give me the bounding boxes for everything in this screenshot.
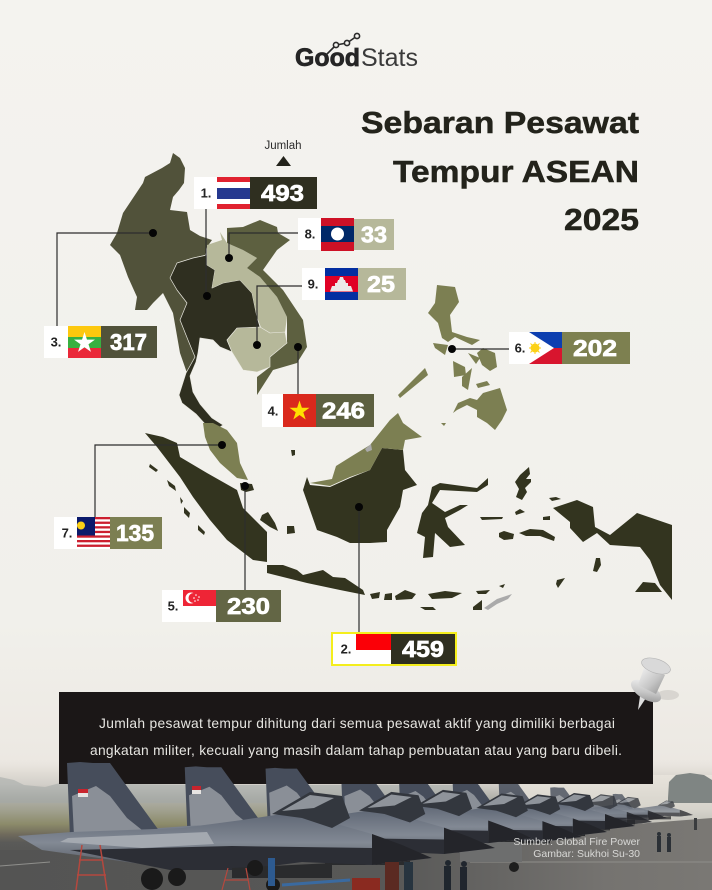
- label 3: Myanmar 317: 317: [110, 329, 147, 355]
- label 9: Cambodia 25: 9.: [308, 276, 318, 292]
- map: Mindanao: [453, 388, 507, 430]
- label 9: Cambodia 25: 25: [367, 271, 395, 297]
- map: Riau islands: [240, 483, 254, 492]
- map: Laos: [207, 232, 287, 333]
- source credit: [513, 836, 640, 860]
- grey service truck: [460, 842, 522, 862]
- map: Myanmar: [110, 153, 212, 373]
- label 4: Vietnam 246: 246: [322, 398, 365, 424]
- source credit: Sumber: Global Fire Power: [513, 836, 640, 848]
- map: Palawan: [398, 368, 428, 398]
- label 9: Cambodia 25: [302, 268, 406, 300]
- label 5: Singapore 230: 230: [227, 593, 270, 619]
- map: Lesser Sunda Islands: [370, 584, 505, 610]
- map: Vietnam: [227, 220, 307, 395]
- label 1: Thailand 493: 493: [261, 180, 304, 206]
- label 6: Philippines 202: [509, 332, 630, 364]
- label 4: Vietnam 246: 4.: [268, 404, 278, 418]
- landing gear and ground crew: [76, 818, 697, 890]
- label 2: Indonesia 459: 2.: [341, 642, 351, 656]
- label 7: Malaysia 135: 135: [116, 520, 154, 546]
- map: Luzon: [428, 285, 480, 345]
- label 3: Myanmar 317: [44, 326, 157, 358]
- map: Sulawesi: [417, 478, 488, 558]
- map: Kalimantan: [303, 448, 417, 543]
- label 5: Singapore 230: 5.: [168, 598, 178, 614]
- label 1: Thailand 493: 1.: [201, 186, 211, 200]
- label 8: Laos 33: 8.: [305, 226, 315, 242]
- map: Papua south coast: [635, 582, 662, 592]
- info note box: Jumlah pesawat tempur dihitung dari semua pesawat aktif yang dimiliki berbagai: [99, 716, 615, 731]
- label 5: Singapore 230: [162, 590, 281, 622]
- map: Maluku islands: [480, 467, 601, 588]
- label 8: Laos 33: [298, 218, 394, 251]
- logo: GoodStats: Good: [295, 44, 360, 72]
- photo background: airfield: [0, 758, 712, 890]
- label 3: Myanmar 317: 3.: [51, 334, 61, 350]
- label 8: Laos 33: 33: [361, 222, 387, 248]
- logo: GoodStats: [295, 33, 418, 72]
- map of Southeast Asia: [110, 153, 672, 610]
- bright right side of airfield: [520, 775, 712, 833]
- label 7: Malaysia 135: [54, 517, 162, 549]
- map: Timor-Leste: [484, 594, 512, 610]
- legend: Jumlah sort indicator: Jumlah: [264, 140, 302, 152]
- logo: GoodStats: Stats: [361, 44, 418, 72]
- label 4: Vietnam 246: [262, 394, 374, 427]
- legend: Jumlah sort indicator: [264, 140, 302, 166]
- map: Papua: [553, 500, 672, 600]
- map: islands west of Sumatra: [149, 450, 295, 535]
- title: Tempur ASEAN: [393, 154, 639, 189]
- title: 2025: [564, 202, 639, 237]
- label 2: Indonesia 459: 459: [402, 636, 444, 662]
- map: Mindoro: [433, 343, 448, 355]
- map: Cambodia: [227, 327, 287, 372]
- location dots: [149, 229, 456, 511]
- fighter jets behind the note box: [309, 774, 693, 850]
- connector lines: [57, 209, 509, 632]
- label 6: Philippines 202: 6.: [515, 340, 525, 356]
- map: Visayas: [453, 361, 466, 377]
- map: East Malaysia: [310, 413, 422, 486]
- tarmac: [0, 818, 712, 890]
- info note box: [59, 692, 653, 784]
- label 1: Thailand 493: [194, 177, 317, 209]
- icon: push pin: [627, 655, 679, 710]
- fighter jets in front of the note box: [18, 762, 697, 890]
- label 6: Philippines 202: 202: [573, 335, 617, 361]
- title: [361, 105, 639, 237]
- map: Peninsular Malaysia: [203, 423, 248, 480]
- source credit: Gambar: Sukhoi Su-30: [533, 848, 640, 860]
- map: Brunei: [365, 444, 372, 452]
- map: Sumatra: [145, 433, 267, 562]
- map: Philippines: [398, 285, 507, 430]
- title: Sebaran Pesawat: [361, 105, 639, 140]
- map: Java: [267, 565, 365, 595]
- label 2: Indonesia 459: [332, 633, 456, 665]
- label 7: Malaysia 135: 7.: [62, 526, 72, 540]
- map: Thailand: [170, 255, 260, 429]
- info note box: angkatan militer, kecuali yang masih dalam tahap pembuatan atau yang baru dibeli.: [90, 743, 622, 758]
- tail flags: [78, 789, 88, 793]
- distant tree lines: [0, 777, 480, 803]
